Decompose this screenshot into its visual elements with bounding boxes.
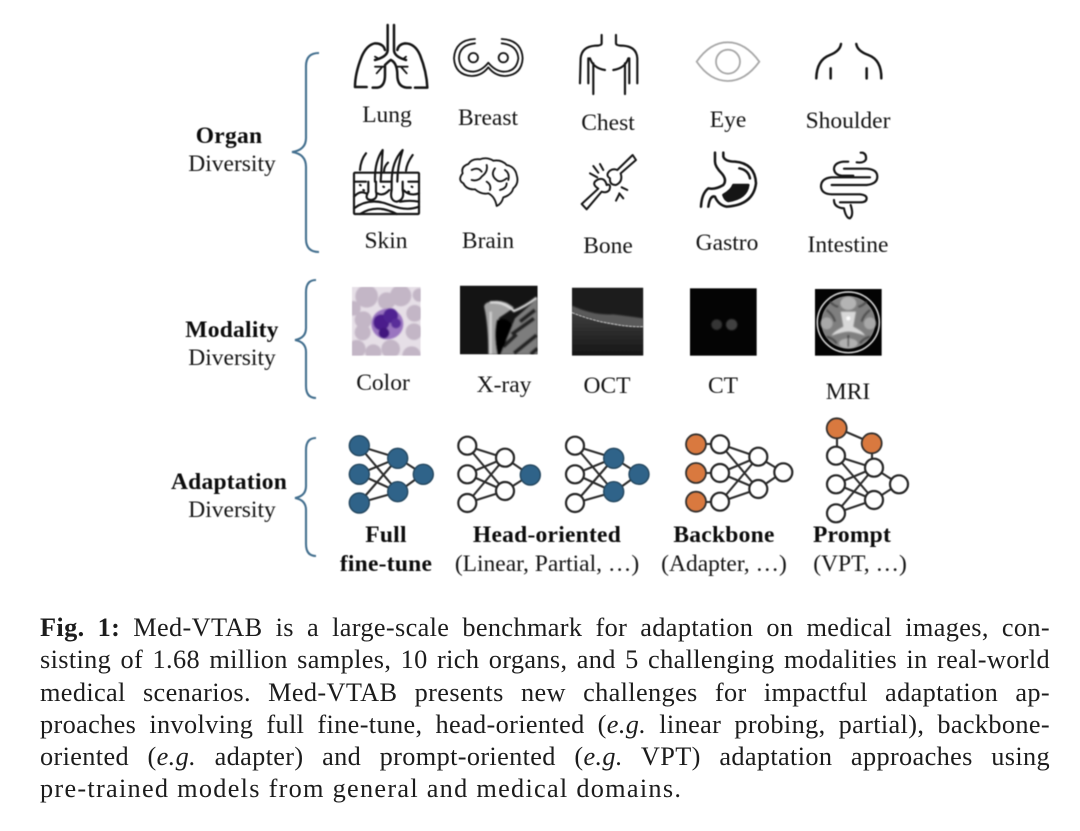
icon: breast <box>454 39 523 76</box>
label: organ diversity <box>188 123 276 177</box>
adaptation labels: (VPT, …) <box>813 551 907 577</box>
adaptation labels: Backbone <box>673 522 775 548</box>
modality labels: CT <box>708 373 738 399</box>
modality labels <box>356 370 870 405</box>
organ labels: Eye <box>710 107 746 133</box>
panel: modality diversity <box>185 280 882 405</box>
label: organ diversity: Organ <box>196 123 262 149</box>
modality labels: Color <box>356 370 410 396</box>
icon: bone <box>582 155 636 209</box>
panel: adaptation diversity <box>171 418 908 577</box>
organ labels: Brain <box>462 228 514 254</box>
organ labels: Gastro <box>696 230 758 256</box>
icon: shoulder <box>816 44 881 78</box>
network: full fine-tune <box>349 436 433 513</box>
organ labels: Skin <box>364 228 408 254</box>
icon: intestine <box>821 153 877 218</box>
icon: gastro <box>701 153 756 207</box>
caption text: oriented (e.g. adapter) and prompt-oriented (e.g. VPT) adaptation approaches using <box>40 742 1050 771</box>
modality labels: X-ray <box>477 372 532 398</box>
modality labels: MRI <box>826 379 870 405</box>
adaptation labels: Head-oriented <box>473 522 621 548</box>
icon: chest <box>580 35 637 94</box>
organ labels: Intestine <box>808 232 888 258</box>
caption text: pre-trained models from general and medical domains. <box>40 774 682 803</box>
label: modality diversity: Modality <box>185 317 279 343</box>
organ labels: Shoulder <box>806 108 891 134</box>
panel: organ diversity <box>188 25 891 259</box>
adaptation labels: (Adapter, …) <box>661 551 787 577</box>
label: adaptation diversity: Adaptation <box>171 469 287 495</box>
network: head-oriented linear <box>458 437 540 512</box>
diagram: Med-VTAB diversity overview <box>170 23 910 577</box>
label: adaptation diversity: Diversity <box>188 497 276 523</box>
adaptation labels: Full <box>365 522 407 548</box>
bracket: organ <box>292 53 319 252</box>
icon: lung <box>355 25 427 88</box>
adaptation labels: (Linear, Partial, …) <box>455 551 639 577</box>
network: head-oriented partial <box>566 437 649 512</box>
label: adaptation diversity <box>171 469 287 523</box>
icon: skin <box>354 150 419 214</box>
adaptation labels <box>340 522 907 577</box>
network: backbone adapter <box>686 434 792 512</box>
organ labels: Bone <box>583 233 633 259</box>
organ labels <box>362 102 891 259</box>
bracket: adaptation <box>295 438 316 556</box>
icon: eye <box>697 42 759 81</box>
image: CT <box>690 288 757 356</box>
organ labels: Breast <box>458 105 518 131</box>
caption text: Fig. 1: Med-VTAB is a large-scale benchmark for adaptation on medical images, con- <box>40 613 1050 642</box>
label: modality diversity: Diversity <box>188 345 276 371</box>
organ labels: Chest <box>581 110 635 136</box>
adaptation labels: Prompt <box>813 522 891 548</box>
adaptation labels: fine-tune <box>340 551 432 577</box>
organ labels: Lung <box>362 102 412 128</box>
image: OCT <box>572 288 643 356</box>
caption text: medical scenarios. Med-VTAB presents new challenges for impactful adaptation ap- <box>40 678 1050 707</box>
label: modality diversity <box>185 317 279 371</box>
network: prompt VPT <box>827 418 908 522</box>
caption text: sisting of 1.68 million samples, 10 rich organs, and 5 challenging modalities in real-world <box>40 645 1050 674</box>
image: MRI <box>815 289 882 356</box>
caption text: proaches involving full fine-tune, head-oriented (e.g. linear probing, partial), backbone- <box>40 710 1050 739</box>
image: color microscopy <box>352 286 422 356</box>
icon: brain <box>460 158 517 206</box>
image: x-ray <box>460 286 538 354</box>
label: organ diversity: Diversity <box>188 151 276 177</box>
bracket: modality <box>295 280 316 398</box>
modality labels: OCT <box>584 373 630 399</box>
